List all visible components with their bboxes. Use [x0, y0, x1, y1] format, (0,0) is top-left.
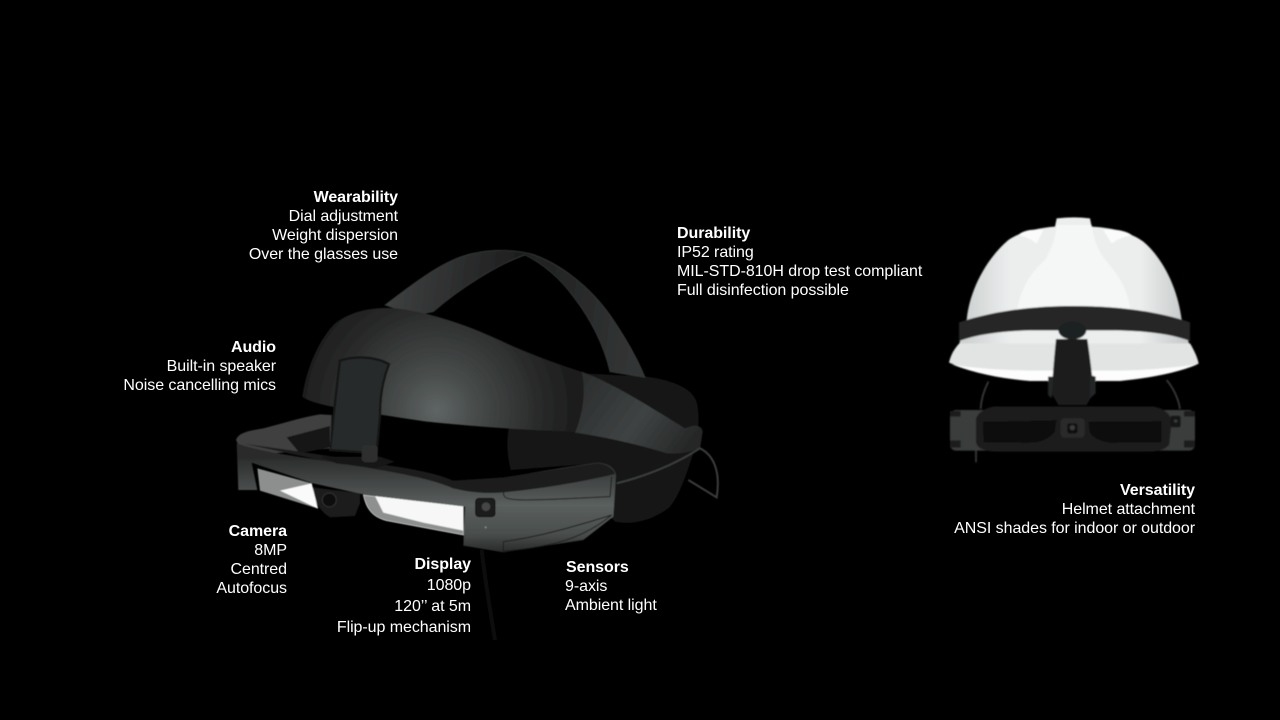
glasses camera: [1061, 418, 1085, 438]
text block: Wearability: [249, 189, 398, 263]
helmet brim: [949, 343, 1199, 379]
text block: Display: [337, 556, 471, 636]
side sensor: [476, 498, 495, 517]
text block: Display: Display: [414, 556, 471, 573]
mount clip: [1052, 339, 1093, 405]
text block: Sensors: Ambient light: [565, 597, 657, 614]
cable loop: [617, 448, 718, 497]
text block: Wearability: Dial adjustment: [289, 208, 398, 225]
text block: Sensors: Sensors: [566, 559, 629, 576]
bar top surface: [245, 444, 615, 493]
hinge arm: [330, 357, 389, 453]
cord: [974, 450, 978, 462]
center camera: [313, 487, 360, 517]
back pad: [507, 373, 699, 523]
text block: Wearability: Wearability: [314, 189, 398, 206]
text block: Versatility: Versatility: [1120, 482, 1195, 499]
text block: Versatility: ANSI shades for indoor or outdoor: [954, 520, 1195, 537]
illustration: helmet front view: [949, 217, 1199, 462]
text block: Wearability: Weight dispersion: [272, 227, 398, 244]
text block: Camera: 8MP: [254, 542, 287, 559]
glasses body: [950, 410, 1195, 451]
text block: Audio: Built-in speaker: [167, 358, 276, 375]
text block: Sensors: [565, 559, 657, 614]
glasses corner brackets: [950, 411, 1195, 448]
text block: Camera: Centred: [230, 561, 287, 578]
top strap: [385, 250, 645, 377]
cord: [482, 550, 495, 640]
hinge mount: [320, 457, 395, 468]
illustration: headset side view: [236, 250, 718, 640]
text block: Durability: Durability: [677, 225, 750, 242]
text block: Versatility: [954, 482, 1195, 537]
front bar: [237, 443, 616, 552]
text block: Wearability: Over the glasses use: [249, 246, 398, 263]
right lens: [363, 495, 463, 535]
glasses right shade: [1088, 421, 1162, 443]
text block: Durability: MIL-STD-810H drop test compliant: [677, 263, 922, 280]
text block: Camera: [216, 523, 288, 597]
text block: Camera: Autofocus: [216, 580, 287, 597]
helmet shell: [958, 217, 1190, 347]
connecting arms: [981, 380, 1180, 409]
text block: Durability: [677, 225, 922, 299]
text block: Sensors: 9-axis: [565, 578, 607, 595]
mount knob: [1058, 321, 1086, 339]
helmet vents: [1018, 230, 1132, 243]
helmet strap: [959, 306, 1190, 341]
text block: Display: 1080p: [427, 577, 471, 594]
side sensor: [1171, 416, 1181, 427]
text block: Camera: Camera: [229, 523, 287, 540]
text block: Display: Flip-up mechanism: [337, 619, 471, 636]
text block: Audio: Audio: [231, 339, 276, 356]
headband side section: [575, 372, 703, 454]
text block: Audio: Noise cancelling mics: [123, 377, 276, 394]
left lens: [257, 468, 318, 509]
text block: Audio: [123, 339, 276, 394]
headband dome: [302, 308, 703, 454]
side panel outlines: [503, 477, 612, 551]
text block: Durability: IP52 rating: [677, 244, 754, 261]
text block: Durability: Full disinfection possible: [677, 282, 849, 299]
left temple: [236, 414, 332, 453]
text block: Versatility: Helmet attachment: [1062, 501, 1195, 518]
helmet centre ridge: [1017, 225, 1131, 309]
glasses left shade: [983, 420, 1057, 443]
text block: Display: 120’’ at 5m: [394, 598, 471, 615]
